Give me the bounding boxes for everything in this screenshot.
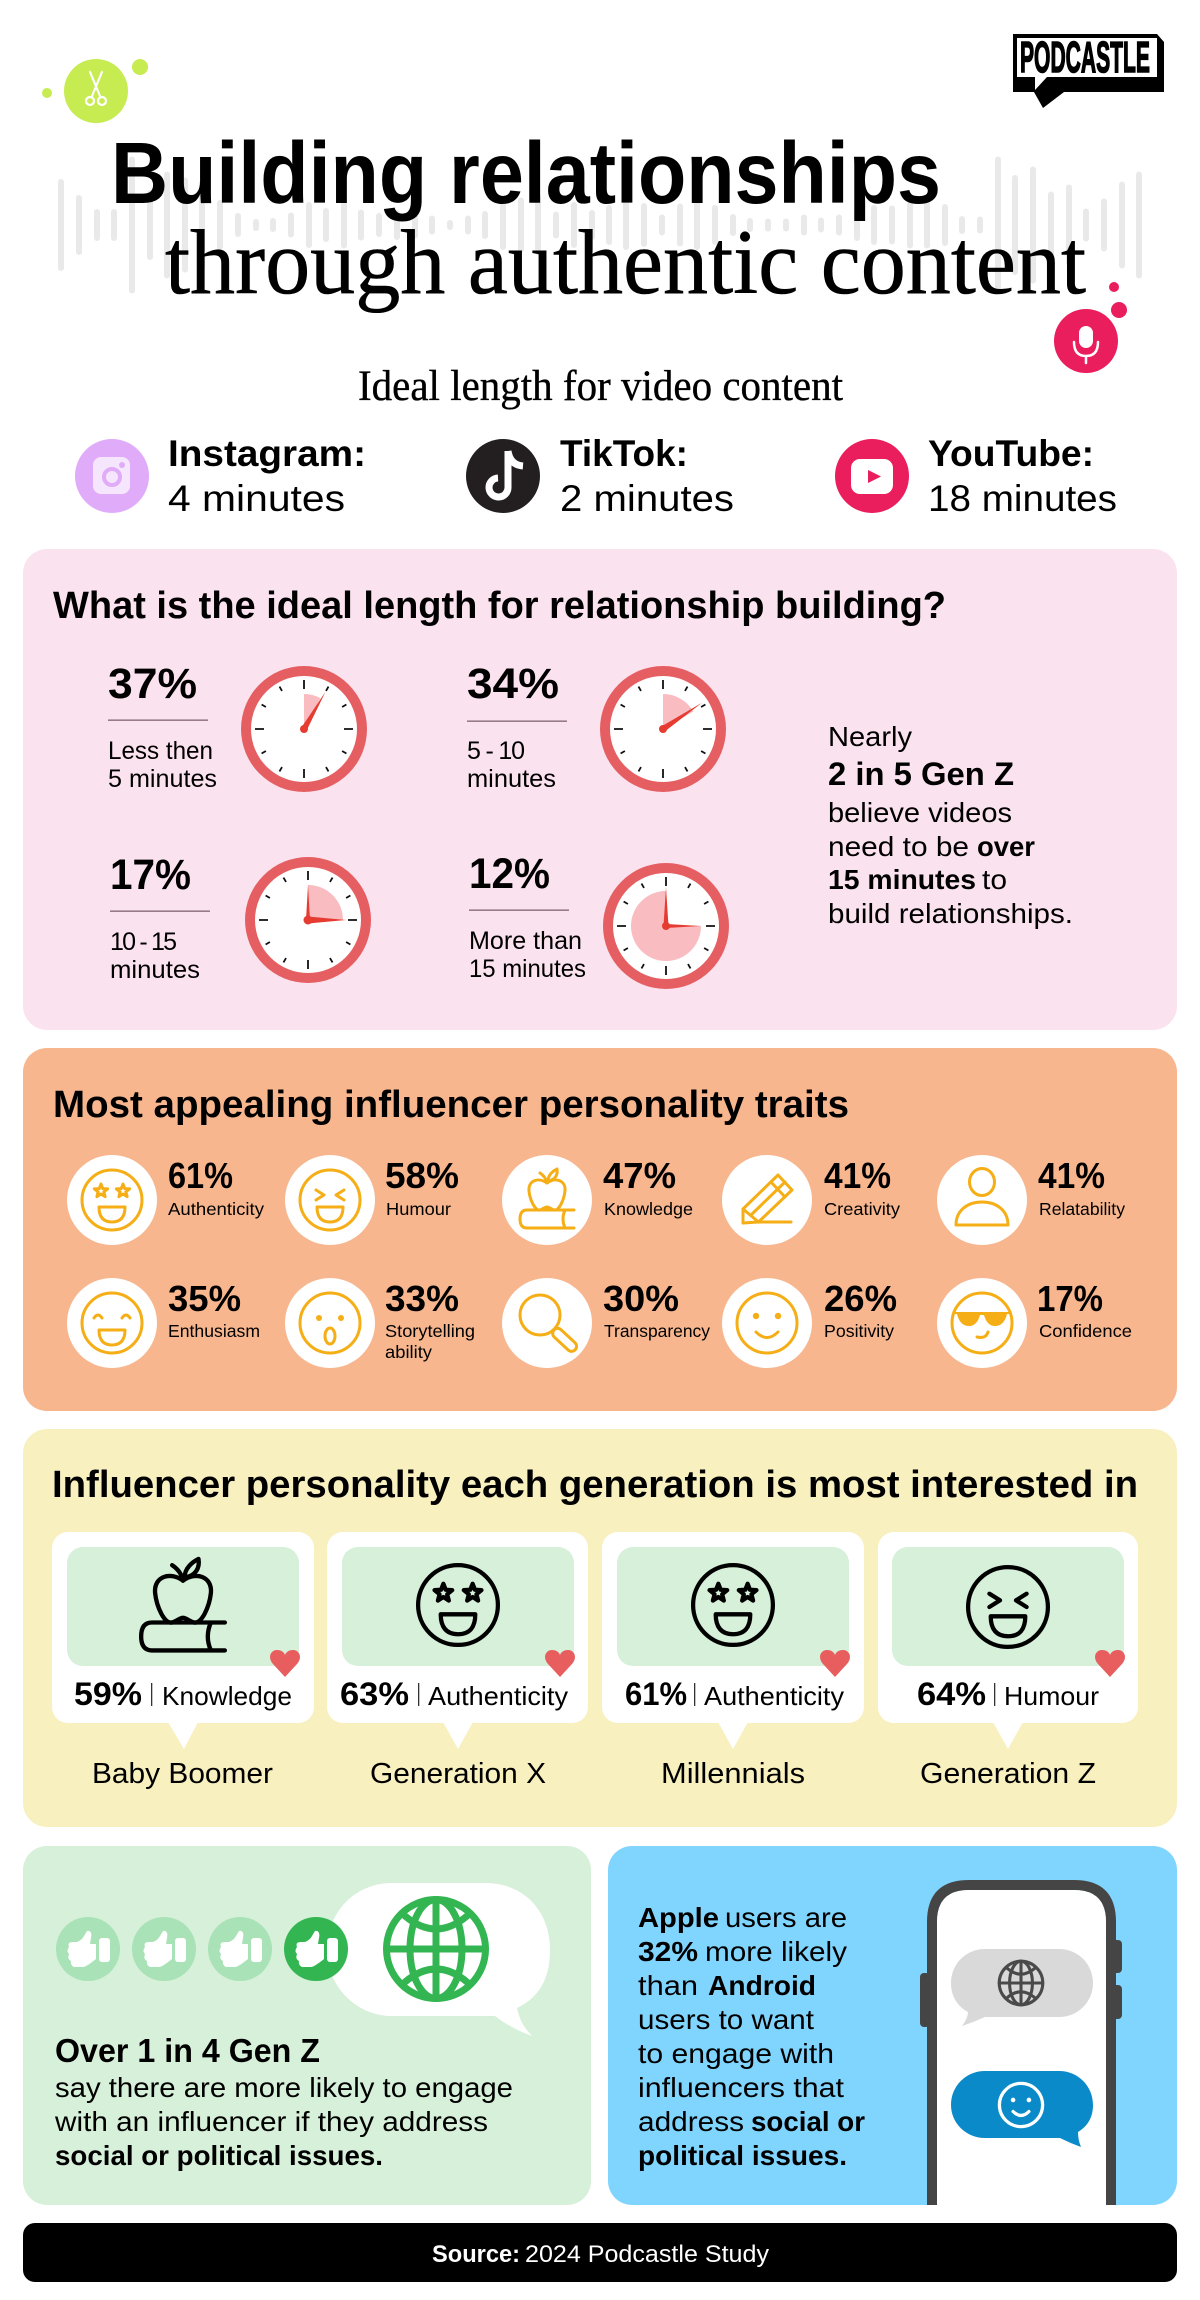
- text: over 1 in 4 Gen Z: social or political issues.: [55, 2140, 383, 2171]
- phone illustration: [920, 1880, 1122, 2205]
- trait: knowledge: 47%: [603, 1155, 676, 1196]
- platform: YouTube: [835, 433, 1117, 519]
- heading: ideal length for video content: Ideal length for video content: [358, 363, 843, 410]
- trait: positivity: 26%: [824, 1278, 897, 1319]
- text: Apple users: influencers that: [638, 2072, 844, 2103]
- card: Baby Boomer: Knowledge: [162, 1681, 292, 1711]
- trait: creativity: Creativity: [824, 1199, 900, 1219]
- text: over 1 in 4 Gen Z: with an influencer if they address: [54, 2106, 488, 2137]
- stat: 37 percent: Less then: [108, 737, 213, 765]
- card: Baby Boomer: [52, 1532, 314, 1790]
- trait: creativity: [722, 1155, 900, 1245]
- callout: 2 in 5 Gen Z: Nearly: [828, 721, 912, 752]
- platform: Instagram: [75, 433, 366, 519]
- trait: humour: [285, 1155, 459, 1245]
- trait: confidence: [937, 1278, 1132, 1368]
- trait: enthusiasm: [67, 1278, 260, 1368]
- trait: knowledge: Knowledge: [604, 1199, 693, 1219]
- trait: confidence: Confidence: [1039, 1321, 1132, 1341]
- stat: 17 percent: minutes: [110, 956, 200, 984]
- platform: TikTok: 2 minutes: [560, 478, 734, 519]
- stat: 37 percent: 37%: [108, 660, 197, 708]
- platform: Instagram: 4 minutes: [168, 478, 345, 519]
- panel: Apple vs Android: [608, 1846, 1177, 2205]
- trait: enthusiasm: 35%: [168, 1278, 241, 1319]
- source bar: Source:: [432, 2241, 520, 2268]
- trait: humour: Humour: [386, 1199, 451, 1219]
- card: Generation Z: Humour: [1004, 1681, 1099, 1711]
- callout: 2 in 5 Gen Z: 2 in 5 Gen Z: [828, 756, 1014, 792]
- panel: ideal length for relationship building: [23, 549, 1177, 1030]
- stat: 37 percent: 5 minutes: [108, 765, 217, 793]
- callout: 2 in 5 Gen Z: 15 minutes: [828, 864, 976, 895]
- card: Generation X: Generation X: [370, 1758, 546, 1790]
- card: Millennials: Millennials: [661, 1758, 805, 1790]
- card: Generation X: [327, 1532, 588, 1790]
- text: Apple users: [638, 1902, 865, 2171]
- title: Building relationships: [111, 125, 941, 222]
- card: Generation X: 63%: [340, 1676, 409, 1712]
- callout: 2 in 5 Gen Z: build relationships.: [828, 898, 1073, 929]
- trait: authenticity: [67, 1155, 264, 1245]
- trait: authenticity: 61%: [168, 1155, 233, 1196]
- text: Apple users: users to want: [638, 2004, 814, 2035]
- text: Apple users: more likely: [705, 1936, 847, 1967]
- text: Apple users: than: [638, 1970, 698, 2001]
- text: Apple users: address: [638, 2106, 744, 2137]
- panel: personality by generation: [23, 1429, 1177, 1827]
- clock: over 15 minutes: [603, 863, 729, 989]
- logo: Podcastle: [1013, 33, 1164, 108]
- trait: relatability: Relatability: [1039, 1199, 1125, 1219]
- trait: humour: 58%: [385, 1155, 459, 1196]
- trait: knowledge: [502, 1155, 693, 1245]
- panel: Gen Z social issues: [23, 1846, 591, 2205]
- stat: 12 percent: [469, 850, 586, 983]
- text: Apple users: Android: [708, 1970, 816, 2001]
- trait: creativity: 41%: [824, 1155, 891, 1196]
- stat: 17 percent: 10 - 15: [110, 928, 177, 956]
- callout: 2 in 5 Gen Z: [828, 721, 1073, 929]
- card: Millennials: [602, 1532, 864, 1790]
- stat: 34 percent: minutes: [467, 765, 556, 793]
- source bar: 2024 Podcastle Study: [525, 2241, 769, 2268]
- panel heading: Most appealing influencer personality traits: [53, 1084, 849, 1126]
- trait: storytelling ability: 33%: [385, 1278, 459, 1319]
- stat: 37 percent: [108, 660, 217, 793]
- stat: 12 percent: 15 minutes: [469, 955, 586, 983]
- text: over 1 in 4 Gen Z: Over 1 in 4 Gen Z: [55, 2032, 320, 2069]
- trait: confidence: 17%: [1037, 1278, 1103, 1319]
- stat: 34 percent: 34%: [467, 660, 559, 708]
- platform: YouTube: 18 minutes: [928, 478, 1117, 519]
- stat: 17 percent: 17%: [110, 851, 191, 899]
- stat: 12 percent: 12%: [469, 850, 550, 898]
- card: Baby Boomer: 59%: [74, 1676, 142, 1712]
- title: through authentic content: [165, 211, 1086, 313]
- panel: most appealing personality traits: [23, 1048, 1177, 1411]
- icon: scissors badge: [42, 59, 148, 123]
- stat: 34 percent: 5 - 10: [467, 737, 525, 765]
- clock: 5 to 10 minutes: [600, 666, 726, 792]
- chat bubble: grey globe: [951, 1949, 1093, 2026]
- trait: transparency: [502, 1278, 710, 1368]
- waveform background: [61, 160, 1139, 290]
- trait: storytelling ability: Storytelling: [385, 1321, 475, 1341]
- trait: authenticity: Authenticity: [168, 1199, 264, 1219]
- card: Millennials: 61%: [625, 1676, 687, 1712]
- text: Apple users: users are: [725, 1902, 847, 1933]
- trait: enthusiasm: Enthusiasm: [168, 1321, 260, 1341]
- icon: microphone badge: [1054, 282, 1127, 373]
- text: Apple users: 32%: [638, 1936, 698, 1967]
- card: Generation X: Authenticity: [428, 1681, 568, 1711]
- text: Apple users: Apple: [638, 1902, 719, 1933]
- clock: under 5 minutes: [241, 666, 367, 792]
- stat: 34 percent: [467, 660, 567, 793]
- source bar: [23, 2223, 1177, 2282]
- text: over 1 in 4 Gen Z: say there are more likely to engage: [55, 2072, 513, 2103]
- text: Apple users: political issues.: [638, 2140, 847, 2171]
- callout: 2 in 5 Gen Z: to: [982, 864, 1007, 895]
- text: Apple users: social or: [751, 2106, 865, 2137]
- trait: transparency: 30%: [603, 1278, 679, 1319]
- platform: YouTube: YouTube:: [928, 433, 1094, 474]
- stat: 17 percent: [110, 851, 210, 984]
- trait: positivity: Positivity: [824, 1321, 894, 1341]
- card: Millennials: Authenticity: [704, 1681, 844, 1711]
- card: Generation Z: 64%: [917, 1676, 986, 1712]
- text: over 1 in 4 Gen Z: [54, 2032, 513, 2171]
- trait: relatability: 41%: [1038, 1155, 1105, 1196]
- chat bubble: blue smiley: [951, 2071, 1093, 2147]
- stat: 12 percent: More than: [469, 927, 582, 955]
- clock: 10 to 15 minutes: [245, 857, 371, 983]
- platform: TikTok: [466, 433, 734, 519]
- speech bubble with globe: [327, 1883, 550, 2036]
- trait: relatability: [937, 1155, 1125, 1245]
- title: [111, 125, 1086, 313]
- trait: storytelling ability: ability: [385, 1342, 432, 1362]
- panel heading: Influencer personality each generation is most interested in: [52, 1464, 1138, 1506]
- trait: transparency: Transparency: [604, 1321, 710, 1341]
- callout: 2 in 5 Gen Z: believe videos: [828, 797, 1012, 828]
- text: Apple users: to engage with: [638, 2038, 834, 2069]
- card: Generation Z: Generation Z: [920, 1758, 1096, 1790]
- platform: Instagram: Instagram:: [168, 433, 366, 474]
- card: Generation Z: [878, 1532, 1138, 1790]
- callout: 2 in 5 Gen Z: over: [977, 831, 1035, 862]
- panel heading: What is the ideal length for relationship building?: [53, 585, 946, 627]
- card: Baby Boomer: Baby Boomer: [92, 1758, 273, 1790]
- trait: positivity: [722, 1278, 897, 1368]
- trait: storytelling ability: [285, 1278, 475, 1368]
- thumbs up row: 1 in 4: [56, 1917, 348, 1981]
- callout: 2 in 5 Gen Z: need to be: [828, 831, 969, 862]
- platform: TikTok: TikTok:: [560, 433, 688, 474]
